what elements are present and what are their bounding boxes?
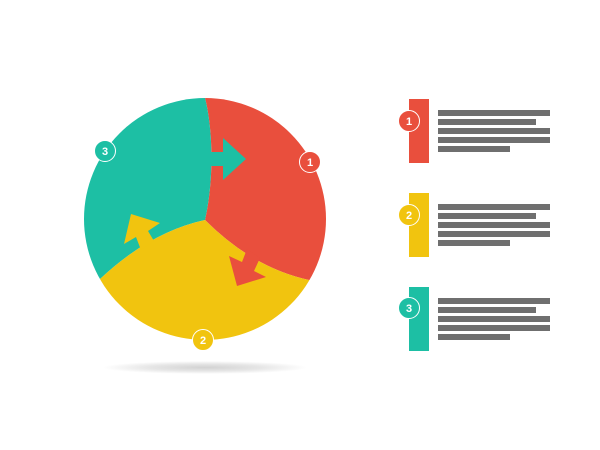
segment: teal	[84, 98, 212, 279]
number badge 3	[398, 298, 420, 318]
colour bar 1	[409, 99, 429, 163]
badge 1	[300, 152, 320, 172]
placeholder text lines 1	[438, 110, 550, 152]
badge 1: 1	[307, 157, 313, 169]
arrow: red into yellow	[229, 249, 266, 286]
colour bar 3	[409, 287, 429, 351]
placeholder text lines 2	[438, 204, 550, 246]
legend item 2	[398, 193, 550, 257]
badge 2	[192, 330, 214, 350]
segment: yellow	[100, 220, 310, 340]
badge 2: 2	[200, 335, 206, 347]
arrow: teal into red	[208, 138, 246, 180]
placeholder text lines 3	[438, 298, 550, 340]
colour bar 2	[409, 193, 429, 257]
badge 3	[94, 140, 116, 162]
ground shadow	[103, 361, 307, 374]
segment: red	[205, 98, 326, 280]
infographic canvas	[84, 98, 550, 373]
badge 3: 3	[102, 146, 108, 158]
legend item 1	[398, 99, 550, 163]
number badge 1	[398, 110, 420, 132]
number badge 1: 1	[406, 116, 412, 128]
legend item 3	[398, 287, 550, 351]
number badge 2	[398, 204, 420, 226]
pie diagram	[84, 98, 326, 350]
number badge 2: 2	[406, 210, 412, 222]
arrow: yellow into teal	[124, 214, 160, 250]
number badge 3: 3	[406, 303, 412, 315]
